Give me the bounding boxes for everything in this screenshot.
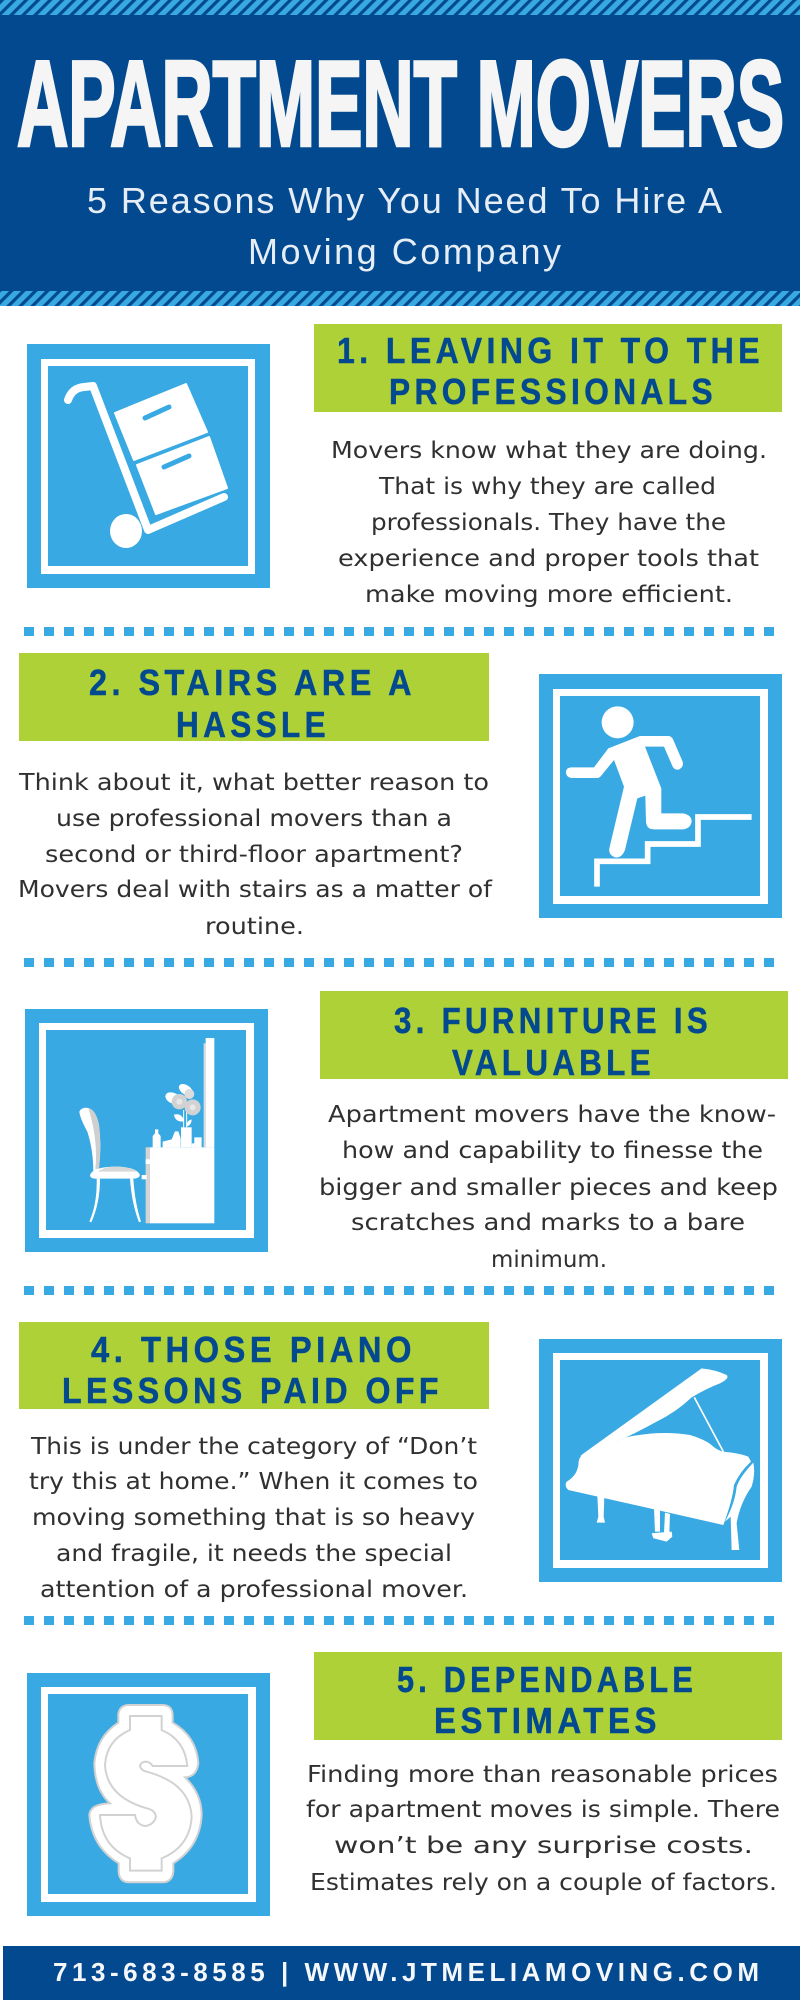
heading banner 3: VALUABLE bbox=[452, 1042, 655, 1083]
section 5 bbox=[27, 1652, 782, 1916]
header banner bbox=[0, 0, 800, 306]
section 3 bbox=[25, 991, 788, 1273]
heading banner 5: 5. DEPENDABLE bbox=[397, 1659, 697, 1700]
body text 2: routine. bbox=[205, 912, 304, 940]
body text 2: Movers deal with stairs as a matter of bbox=[18, 875, 493, 903]
body text 1: make moving more efficient. bbox=[365, 580, 733, 608]
body text 1: That is why they are called bbox=[378, 472, 716, 500]
section 1 bbox=[27, 324, 782, 608]
body text 4 bbox=[29, 1432, 478, 1603]
heading banner 1: PROFESSIONALS bbox=[389, 371, 717, 412]
body text 1 bbox=[331, 436, 767, 608]
heading banner 5 bbox=[314, 1652, 782, 1741]
icon: hand truck with boxes bbox=[27, 344, 270, 588]
body text 4: This is under the category of “Don’t bbox=[30, 1432, 477, 1460]
icon: vanity table and chair bbox=[25, 1009, 268, 1252]
body text 2: use professional movers than a bbox=[56, 804, 452, 832]
body text 1: Movers know what they are doing. bbox=[331, 436, 767, 464]
body text 2: second or third-floor apartment? bbox=[45, 840, 463, 868]
body text 5: Estimates rely on a couple of factors. bbox=[310, 1868, 777, 1896]
heading banner 2: HASSLE bbox=[176, 704, 330, 745]
subtitle: 5 Reasons Why You Need To Hire A bbox=[87, 180, 722, 221]
body text 5: won’t be any surprise costs. bbox=[334, 1831, 753, 1859]
heading banner 4: 4. THOSE PIANO bbox=[91, 1329, 416, 1370]
body text 5 bbox=[306, 1760, 780, 1896]
body text 1: experience and proper tools that bbox=[338, 544, 759, 572]
heading banner 1 bbox=[314, 324, 782, 412]
body text 3: bigger and smaller pieces and keep bbox=[319, 1173, 778, 1201]
body text 3: how and capability to finesse the bbox=[342, 1136, 763, 1164]
heading banner 4 bbox=[19, 1322, 489, 1411]
heading banner 4: LESSONS PAID OFF bbox=[62, 1370, 443, 1411]
icon: grand piano bbox=[539, 1339, 782, 1582]
subtitle: Moving Company bbox=[248, 231, 561, 272]
heading banner 3: 3. FURNITURE IS bbox=[394, 1000, 712, 1041]
body text 4: and fragile, it needs the special bbox=[56, 1539, 452, 1567]
body text 4: attention of a professional mover. bbox=[40, 1575, 468, 1603]
heading banner 2 bbox=[19, 653, 489, 745]
footer bar bbox=[3, 1946, 800, 2000]
heading banner 3 bbox=[320, 991, 788, 1083]
body text 5: for apartment moves is simple. There bbox=[306, 1795, 780, 1823]
body text 2 bbox=[18, 768, 493, 940]
footer bar: 713-683-8585 | WWW.JTMELIAMOVING.COM bbox=[53, 1957, 759, 1987]
body text 3: minimum. bbox=[491, 1245, 607, 1273]
body text 3: Apartment movers have the know- bbox=[328, 1100, 776, 1128]
body text 2: Think about it, what better reason to bbox=[18, 768, 489, 796]
body text 5: Finding more than reasonable prices bbox=[307, 1760, 778, 1788]
section 2 bbox=[18, 653, 782, 940]
heading banner 5: ESTIMATES bbox=[434, 1700, 661, 1741]
icon: person climbing stairs bbox=[539, 674, 782, 918]
section 4 bbox=[19, 1322, 782, 1603]
body text 4: moving something that is so heavy bbox=[32, 1503, 475, 1531]
body text 1: professionals. They have the bbox=[371, 508, 726, 536]
icon: dollar sign bbox=[27, 1673, 270, 1916]
body text 3 bbox=[319, 1100, 778, 1273]
heading banner 2: 2. STAIRS ARE A bbox=[89, 662, 416, 703]
subtitle bbox=[87, 180, 722, 272]
body text 3: scratches and marks to a bare bbox=[351, 1208, 745, 1236]
body text 4: try this at home.” When it comes to bbox=[29, 1467, 478, 1495]
